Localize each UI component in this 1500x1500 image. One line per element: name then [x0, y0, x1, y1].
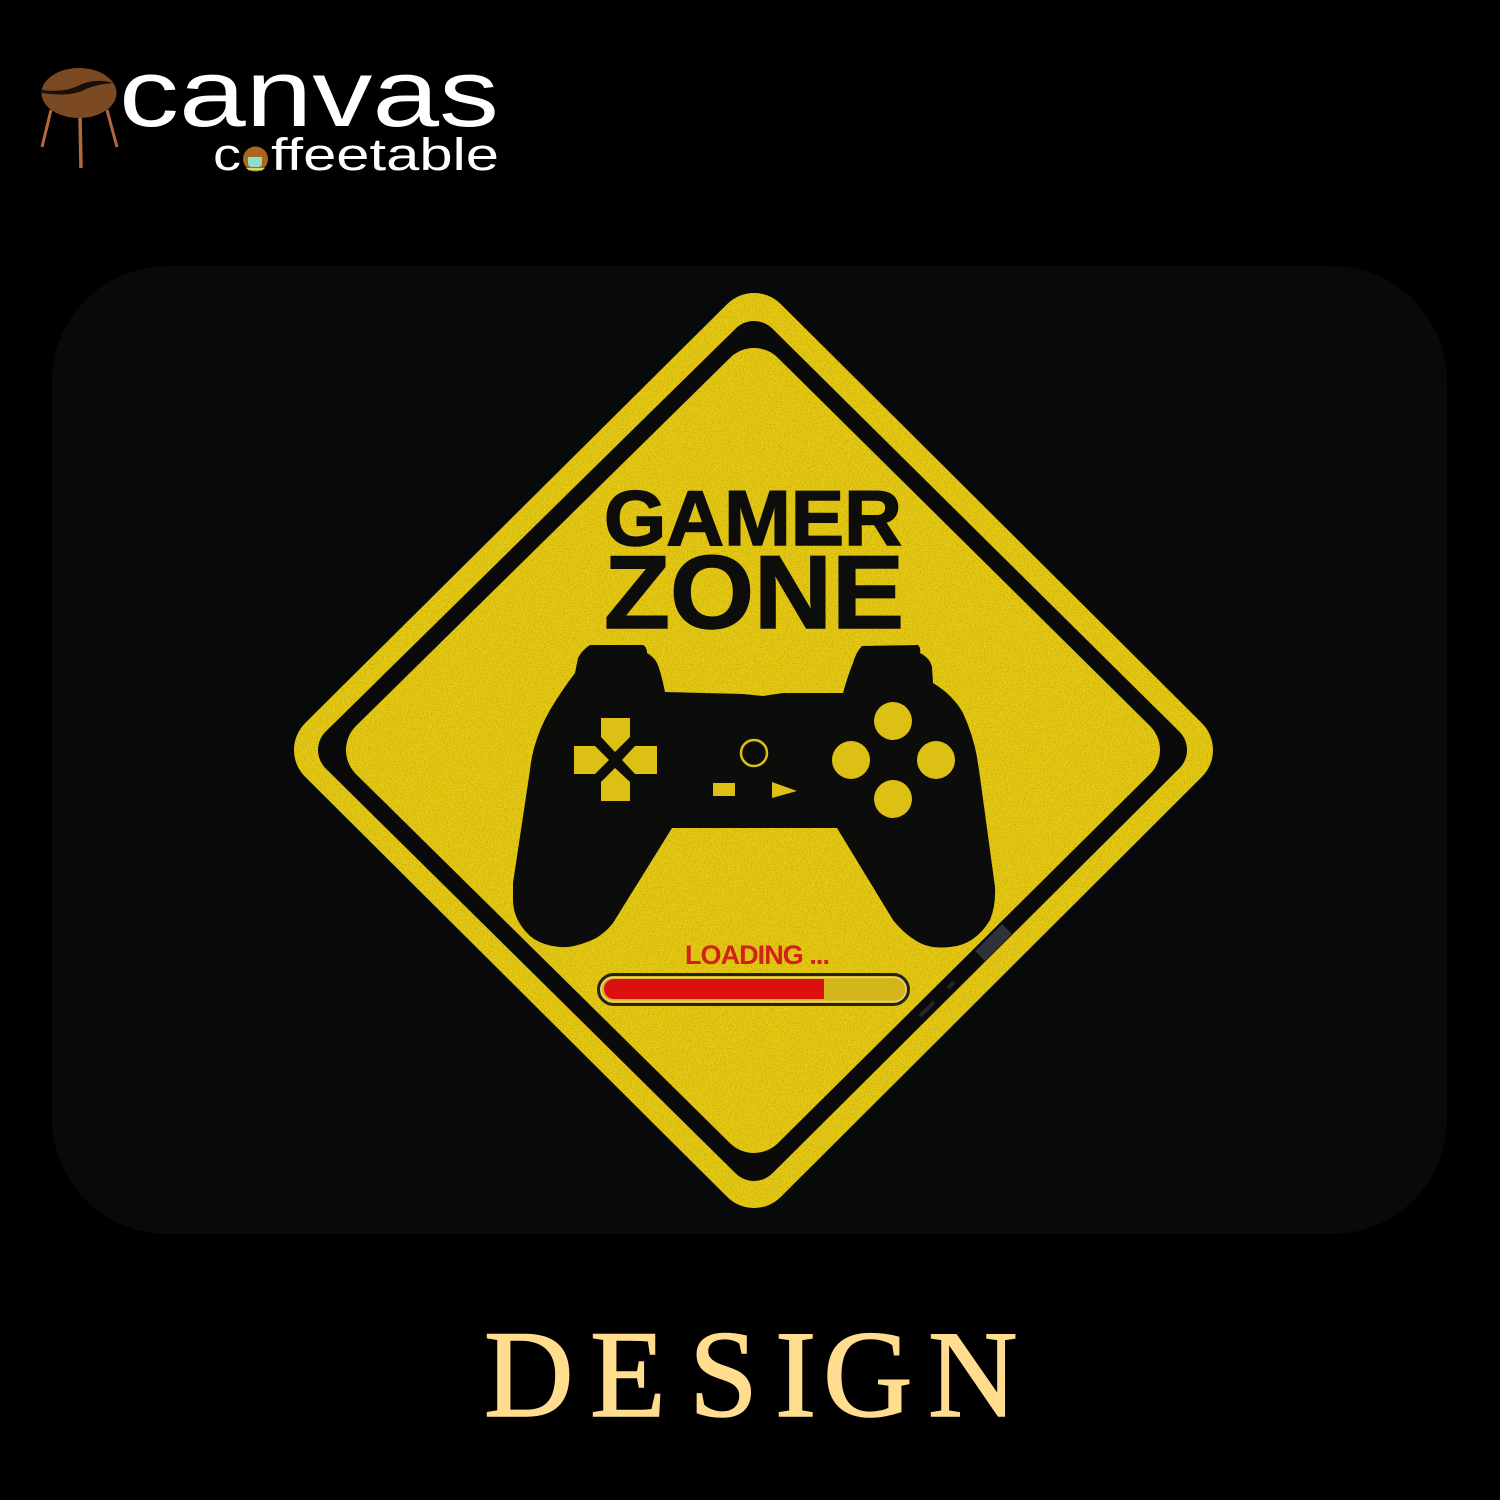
caption: DESIGN: DESIGN	[484, 1306, 1018, 1443]
sign outer yellow border	[332, 331, 1175, 1170]
action buttons	[832, 702, 955, 818]
logo wordmark: coffeetable	[213, 129, 499, 180]
logo wordmark: canvas: canvas	[119, 40, 499, 147]
logo wordmark: coffeetable: ffeetable	[271, 129, 499, 180]
scuff on band	[920, 929, 1007, 1016]
logo: canvas coffeetable	[42, 40, 499, 180]
sign yellow face	[380, 382, 1126, 1119]
d-pad	[574, 718, 657, 801]
controller body	[513, 645, 995, 948]
loading progress bar	[598, 974, 908, 1004]
label: LOADING: LOADING ...	[685, 940, 830, 970]
diamond road sign	[270, 270, 1240, 1230]
heading: GAMER: GAMER	[604, 474, 902, 562]
select button	[713, 783, 735, 796]
fabric grain	[270, 270, 1240, 1230]
heading: ZONE: ZONE	[604, 535, 904, 651]
sign black inner band	[344, 347, 1161, 1155]
logo wordmark: coffeetable: o	[246, 144, 263, 177]
bar inner highlight	[601, 978, 906, 1002]
home button ring	[741, 740, 767, 766]
start button	[772, 782, 797, 798]
icon: game controller	[513, 645, 995, 948]
panel: floor mat	[52, 266, 1447, 1234]
icon: coffee bean table	[42, 68, 117, 168]
logo wordmark: coffeetable: c	[213, 129, 241, 180]
bar outline	[598, 974, 908, 1004]
bar red fill	[604, 979, 824, 999]
